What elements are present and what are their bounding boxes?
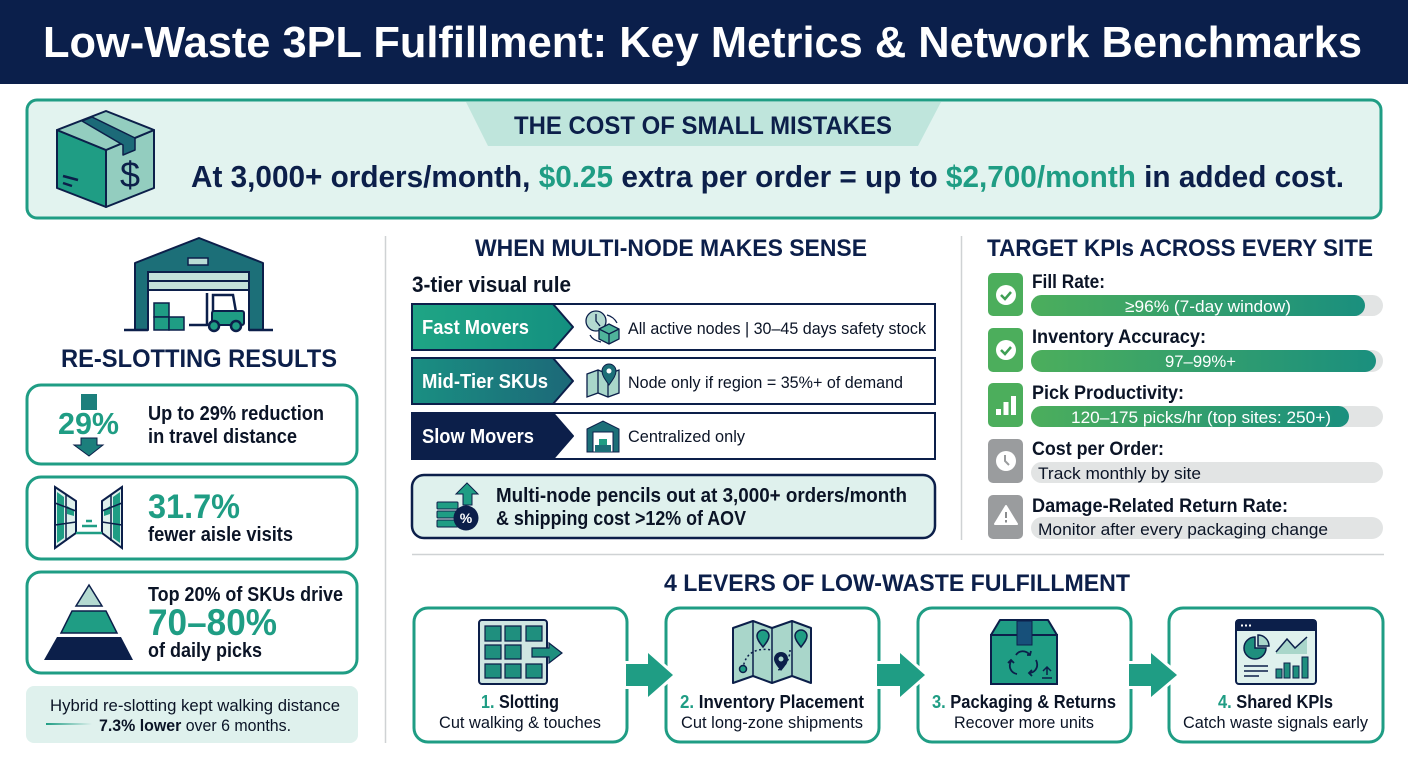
panel: when multi-node makes sense	[412, 235, 935, 538]
KPI: fill rate: ≥96% (7-day window)	[1125, 297, 1291, 316]
stat card: top SKUs: 70–80%	[148, 602, 277, 643]
lever card: inventory placement: Cut long-zone shipments	[681, 714, 863, 732]
icon: central warehouse	[587, 421, 619, 452]
lever card: inventory placement	[666, 608, 879, 742]
stat card: travel distance: Up to 29% reduction	[148, 403, 324, 425]
callout: multi-node threshold	[412, 475, 935, 538]
KPI: damage-related return rate: Damage-Related Return Rate:	[1032, 496, 1288, 517]
tier row: fast movers	[412, 304, 935, 350]
icon: box with dollar sign	[57, 111, 154, 207]
lever card: slotting	[414, 608, 627, 742]
tier row: slow movers: Centralized only	[628, 427, 745, 446]
callout: hybrid re-slotting	[26, 686, 358, 743]
stat card: travel distance	[27, 385, 357, 464]
icon: coins, arrow and percent: %	[460, 510, 473, 526]
icon: coins, arrow and percent	[437, 483, 478, 530]
KPI: cost per order: Track monthly by site	[1038, 464, 1201, 483]
heading: WHEN MULTI-NODE MAKES SENSE	[475, 235, 867, 262]
stat card: top SKUs	[27, 572, 357, 673]
subheading: 3-tier visual rule	[412, 272, 571, 297]
lever card: packaging and returns: 3. Packaging & Returns	[932, 692, 1116, 712]
heading tab	[466, 102, 941, 146]
icon: pyramid	[44, 585, 133, 660]
divider	[386, 236, 1384, 743]
arrow: slotting to inventory placement	[626, 653, 673, 697]
icon: map pin	[587, 364, 619, 397]
stat card: travel distance: 29%	[58, 406, 119, 441]
title banner	[0, 0, 1408, 84]
KPI: fill rate: Fill Rate:	[1032, 272, 1105, 293]
heading: 4 LEVERS OF LOW-WASTE FULFILLMENT	[664, 570, 1130, 597]
panel: the cost of small mistakes	[27, 100, 1381, 218]
heading: RE-SLOTTING RESULTS	[61, 345, 337, 373]
callout: hybrid re-slotting: Hybrid re-slotting kept walking distance	[50, 696, 340, 715]
icon: clock and box	[586, 311, 619, 344]
icon: recycling box	[991, 620, 1057, 684]
icon: aisle shelves	[55, 487, 122, 548]
lever card: packaging and returns	[918, 608, 1131, 742]
lever card: shared KPIs: 4. Shared KPIs	[1218, 692, 1333, 712]
icon: warehouse with forklift	[124, 238, 273, 331]
stat card: travel distance: in travel distance	[148, 426, 297, 448]
KPI: pick productivity: 120–175 picks/hr (top sites: 250+)	[1071, 408, 1331, 427]
stat card: aisle visits: 31.7%	[148, 488, 240, 526]
title banner: Low-Waste 3PL Fulfillment: Key Metrics & Network Benchmarks	[43, 18, 1362, 67]
panel: re-slotting results	[26, 238, 358, 743]
stat card: aisle visits: fewer aisle visits	[148, 524, 293, 546]
heading tab: THE COST OF SMALL MISTAKES	[514, 112, 892, 140]
callout: multi-node threshold: Multi-node pencils out at 3,000+ orders/month	[496, 485, 907, 507]
arrow: inventory placement to packaging	[877, 653, 925, 697]
lever card: shared KPIs	[1169, 608, 1383, 742]
arrow: packaging to shared KPIs	[1129, 653, 1177, 697]
panel: target KPIs	[987, 235, 1383, 539]
stat card: top SKUs: of daily picks	[148, 640, 262, 662]
icon: dashboard	[1236, 620, 1316, 684]
tier row: slow movers	[412, 413, 935, 459]
lever card: inventory placement: 2. Inventory Placement	[680, 692, 864, 712]
lever card: slotting: 1. Slotting	[481, 692, 559, 712]
lever card: shared KPIs: Catch waste signals early	[1183, 714, 1369, 732]
KPI: pick productivity: Pick Productivity:	[1032, 383, 1184, 404]
KPI: inventory accuracy: 97–99%+	[1165, 352, 1236, 371]
tier row: slow movers: Slow Movers	[422, 426, 534, 448]
KPI: fill rate	[988, 272, 1383, 316]
KPI: damage-related return rate: Monitor after every packaging change	[1038, 520, 1328, 539]
callout: hybrid re-slotting: 7.3% lower over 6 months.	[99, 716, 291, 735]
cost statement: At 3,000+ orders/month, $0.25 extra per order = up to $2,700/month in added cost.	[191, 159, 1344, 194]
stat card: aisle visits	[27, 477, 357, 559]
KPI: inventory accuracy: Inventory Accuracy:	[1032, 327, 1206, 348]
icon: route map	[733, 621, 811, 683]
KPI: pick productivity	[988, 383, 1383, 427]
heading: TARGET KPIs ACROSS EVERY SITE	[987, 235, 1373, 262]
tier row: mid-tier SKUs	[412, 358, 935, 404]
lever card: slotting: Cut walking & touches	[439, 714, 601, 732]
KPI: cost per order: Cost per Order:	[1032, 439, 1164, 460]
KPI: damage-related return rate	[988, 495, 1383, 539]
lever card: packaging and returns: Recover more units	[954, 714, 1094, 732]
panel: 4 levers	[414, 570, 1383, 742]
icon: slotting grid	[479, 620, 562, 684]
tier row: mid-tier SKUs: Mid-Tier SKUs	[422, 371, 548, 393]
icon: box with dollar sign: $	[120, 154, 140, 195]
KPI: inventory accuracy	[988, 327, 1383, 372]
tier row: fast movers: All active nodes | 30–45 days safety stock	[628, 319, 926, 338]
KPI: cost per order	[988, 439, 1383, 483]
callout: multi-node threshold: & shipping cost >12% of AOV	[496, 508, 747, 530]
stat card: top SKUs: Top 20% of SKUs drive	[148, 584, 343, 606]
icon: down arrows	[74, 394, 103, 456]
tier row: mid-tier SKUs: Node only if region = 35%+ of demand	[628, 373, 903, 392]
tier row: fast movers: Fast Movers	[422, 317, 529, 339]
